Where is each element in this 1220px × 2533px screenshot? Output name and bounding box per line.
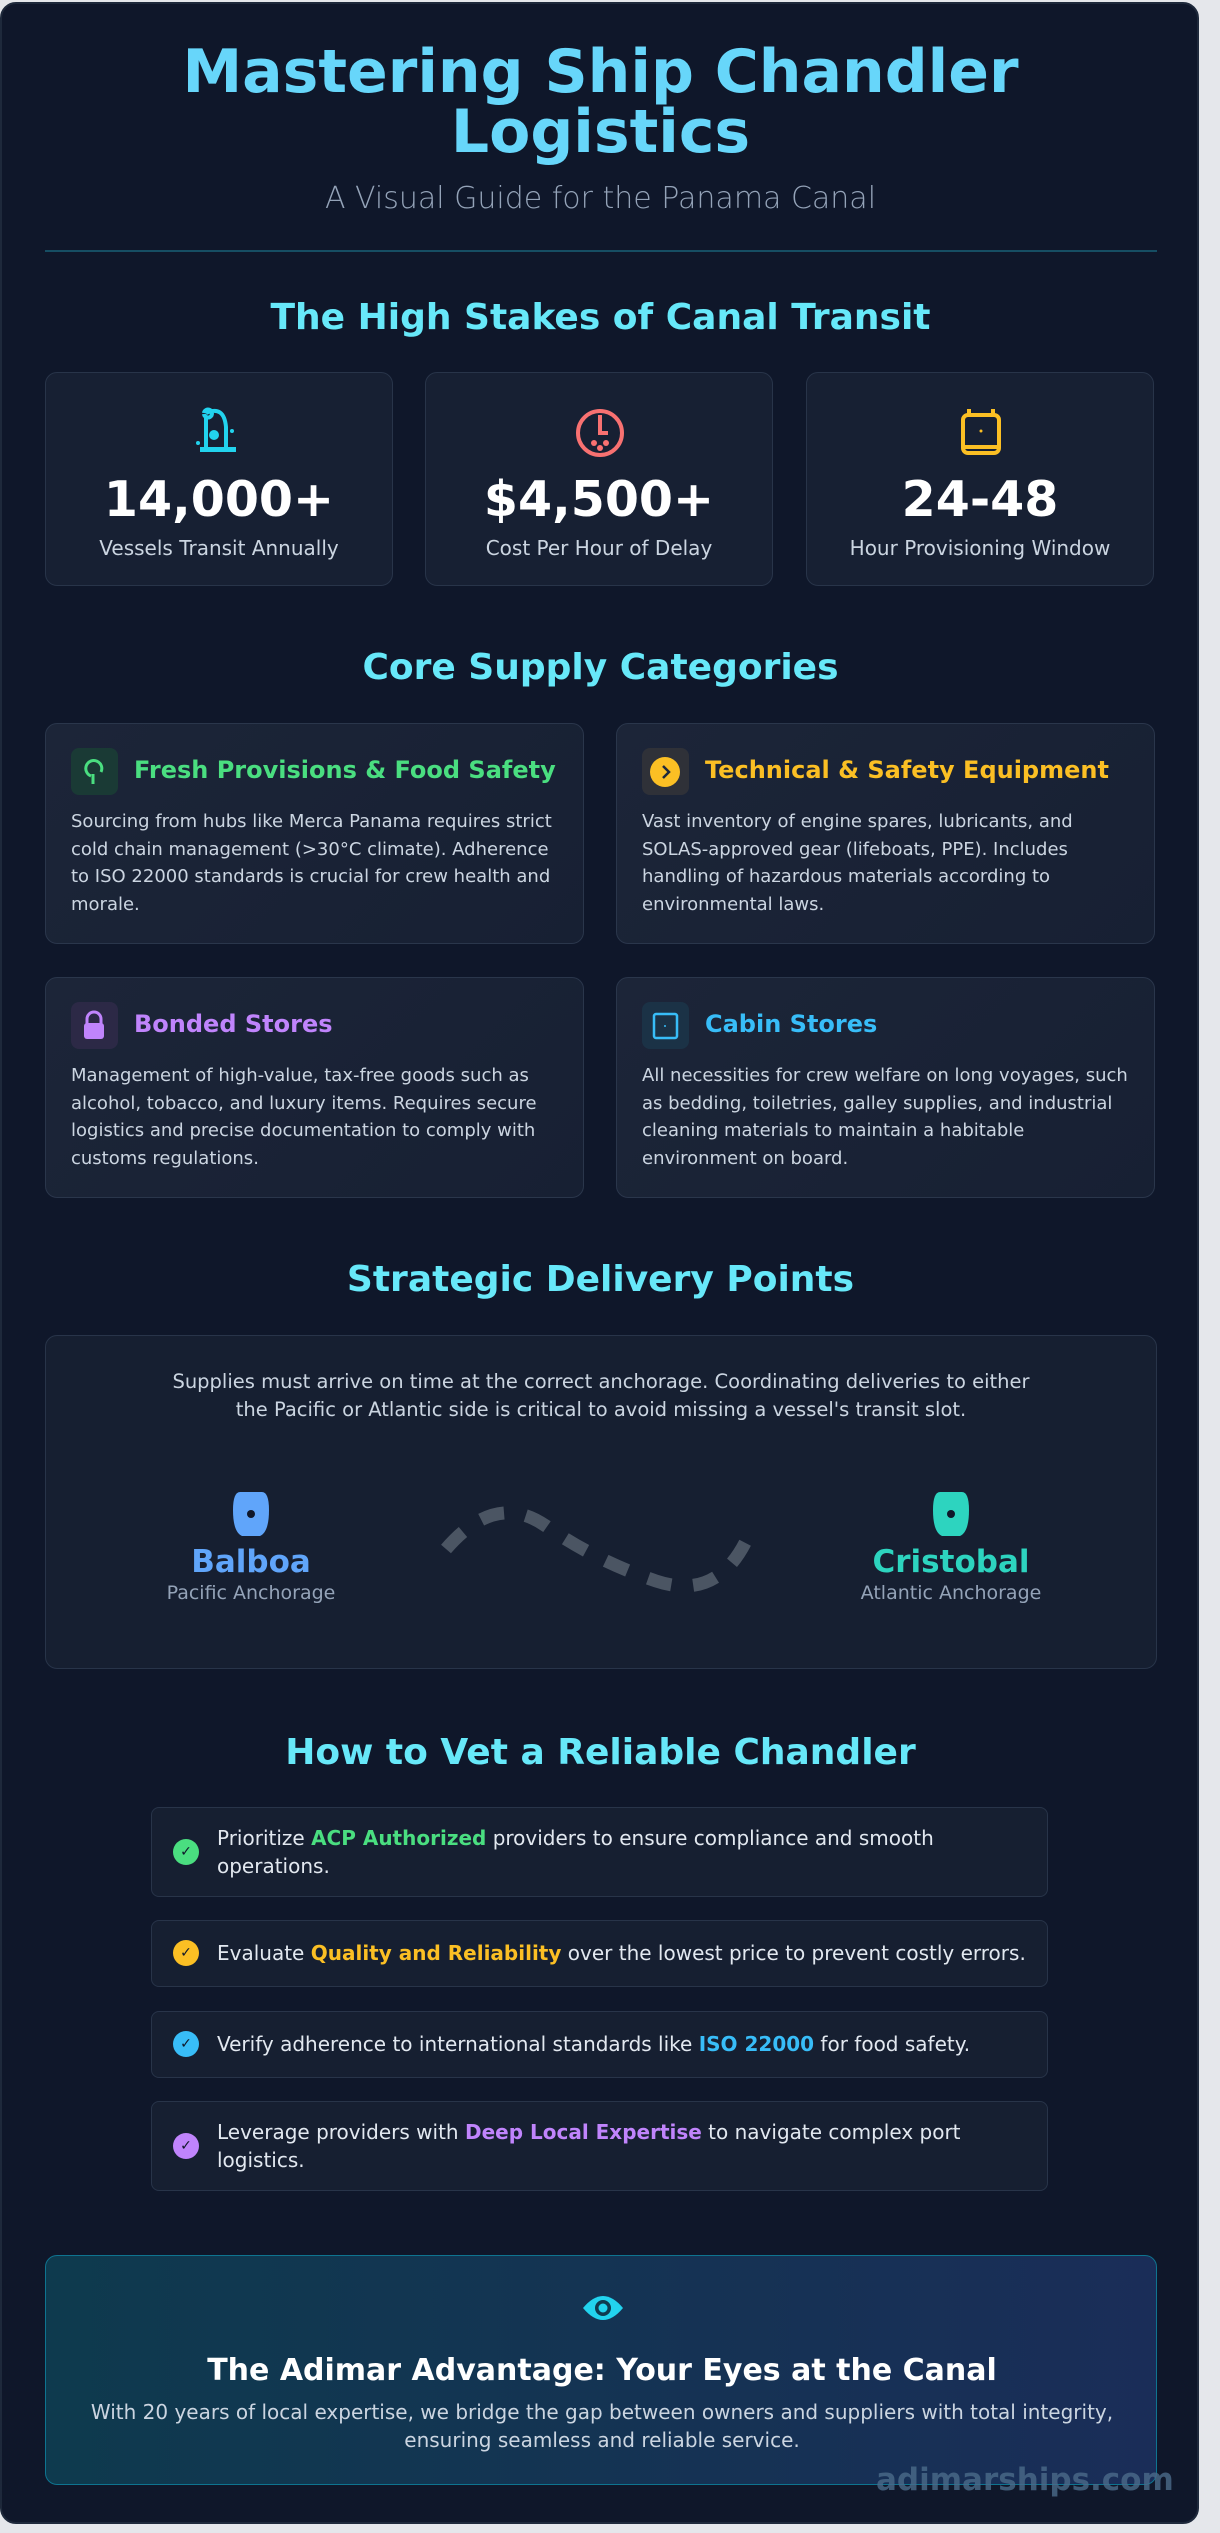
subtitle: A Visual Guide for the Panama Canal: [325, 181, 876, 216]
title: [182, 37, 1019, 167]
title: Mastering Ship Chandler: [182, 37, 1019, 107]
stat: cost: [425, 372, 773, 586]
location: Cristobal: [860, 1492, 1041, 1604]
callout: Adimar advantage: The Adimar Advantage: Your Eyes at the Canal: [207, 2353, 997, 2388]
checklist item 1: Prioritize ACP Authorized providers to ensure compliance and smooth operations.: [217, 1826, 934, 1878]
location: Cristobal: Cristobal: [873, 1544, 1029, 1580]
checklist item 2: Evaluate Quality and Reliability over the lowest price to prevent costly errors.: [217, 1941, 1026, 1965]
location: Balboa: [167, 1492, 335, 1604]
callout: Adimar advantage: [45, 2255, 1157, 2485]
checklist item 1: ✓: [180, 1844, 192, 1860]
icon: leaf: [71, 748, 118, 795]
panel: bonded: [45, 977, 584, 1198]
checklist item 1: [151, 1807, 1048, 1897]
panel: delivery: [45, 1335, 1157, 1669]
heading: core supply: Core Supply Categories: [362, 647, 839, 688]
icon: gear: [642, 748, 689, 795]
panel: cabin: Cabin Stores: [705, 1010, 877, 1038]
stat: window: Hour Provisioning Window: [850, 536, 1110, 560]
stat: window: 24-48: [902, 471, 1058, 528]
location: Balboa: Pacific Anchorage: [167, 1582, 335, 1604]
icon: pin blue: [233, 1492, 269, 1536]
panel: fresh provisions: Fresh Provisions & Food Safety: [134, 756, 556, 784]
stat: vessels: Vessels Transit Annually: [99, 536, 339, 560]
checklist item 2: [151, 1920, 1048, 1987]
panel: technical: [616, 723, 1155, 944]
panel: fresh provisions: Sourcing from hubs like Merca Panama requires strict cold chain management (>30°C climate). Adherence to ISO 22000 standards is crucial for crew health and morale.: [71, 811, 552, 914]
panel: bonded: Management of high-value, tax-free goods such as alcohol, tobacco, and luxury items. Requires secure logistics and precise documentation to comply with customs regulations.: [71, 1065, 537, 1168]
panel: technical: Vast inventory of engine spares, lubricants, and SOLAS-approved gear (lifeboats, PPE). Includes handling of hazardous materials according to environmental laws.: [642, 811, 1073, 914]
icon: clock: [576, 409, 624, 457]
location: Balboa: Balboa: [191, 1544, 311, 1580]
checklist item 3: Verify adherence to international standards like ISO 22000 for food safety.: [217, 2032, 970, 2056]
heading: vet: How to Vet a Reliable Chandler: [285, 1732, 916, 1773]
icon: door: [642, 1002, 689, 1049]
arrow: wave route: [441, 1506, 751, 1592]
panel: bonded: Bonded Stores: [134, 1010, 333, 1038]
checklist item 4: ✓: [180, 2138, 192, 2154]
icon: lock: [71, 1002, 118, 1049]
checklist item 2: ✓: [180, 1945, 192, 1961]
watermark: adimarships.com: [876, 2462, 1174, 2498]
icon: calendar: [961, 409, 1001, 455]
icon: eye: [583, 2296, 623, 2320]
checklist item 3: ✓: [180, 2036, 192, 2052]
panel: fresh provisions: [45, 723, 584, 944]
text: delivery intro: Supplies must arrive on time at the correct anchorage. Coordinating deliveries to either the Pacific or Atlantic side is critical to avoid missing a vessel's transit slot.: [172, 1370, 1030, 1421]
checklist item 3: [151, 2011, 1048, 2078]
heading: high stakes: The High Stakes of Canal Transit: [270, 297, 930, 338]
stat: cost: $4,500+: [484, 471, 714, 528]
panel: cabin: [616, 977, 1155, 1198]
checklist item 4: Leverage providers with Deep Local Expertise to navigate complex port logistics.: [217, 2120, 961, 2172]
panel: technical: Technical & Safety Equipment: [705, 756, 1109, 784]
location: Cristobal: Atlantic Anchorage: [861, 1582, 1041, 1604]
title: Logistics: [451, 97, 750, 167]
stat: vessels: [45, 372, 393, 586]
stat: vessels: 14,000+: [104, 471, 334, 528]
icon: ship: [196, 408, 236, 452]
stat: window: [806, 372, 1154, 586]
checklist item 4: [151, 2101, 1048, 2191]
icon: pin teal: [933, 1492, 969, 1536]
panel: cabin: All necessities for crew welfare on long voyages, such as bedding, toiletries, galley supplies, and industrial cleaning materials to maintain a habitable environment on board.: [642, 1065, 1128, 1168]
stat: cost: Cost Per Hour of Delay: [486, 536, 712, 560]
callout: Adimar advantage: With 20 years of local expertise, we bridge the gap between owners and suppliers with total integrity, ensuring seamless and reliable service.: [91, 2400, 1113, 2452]
heading: delivery: Strategic Delivery Points: [347, 1259, 854, 1300]
